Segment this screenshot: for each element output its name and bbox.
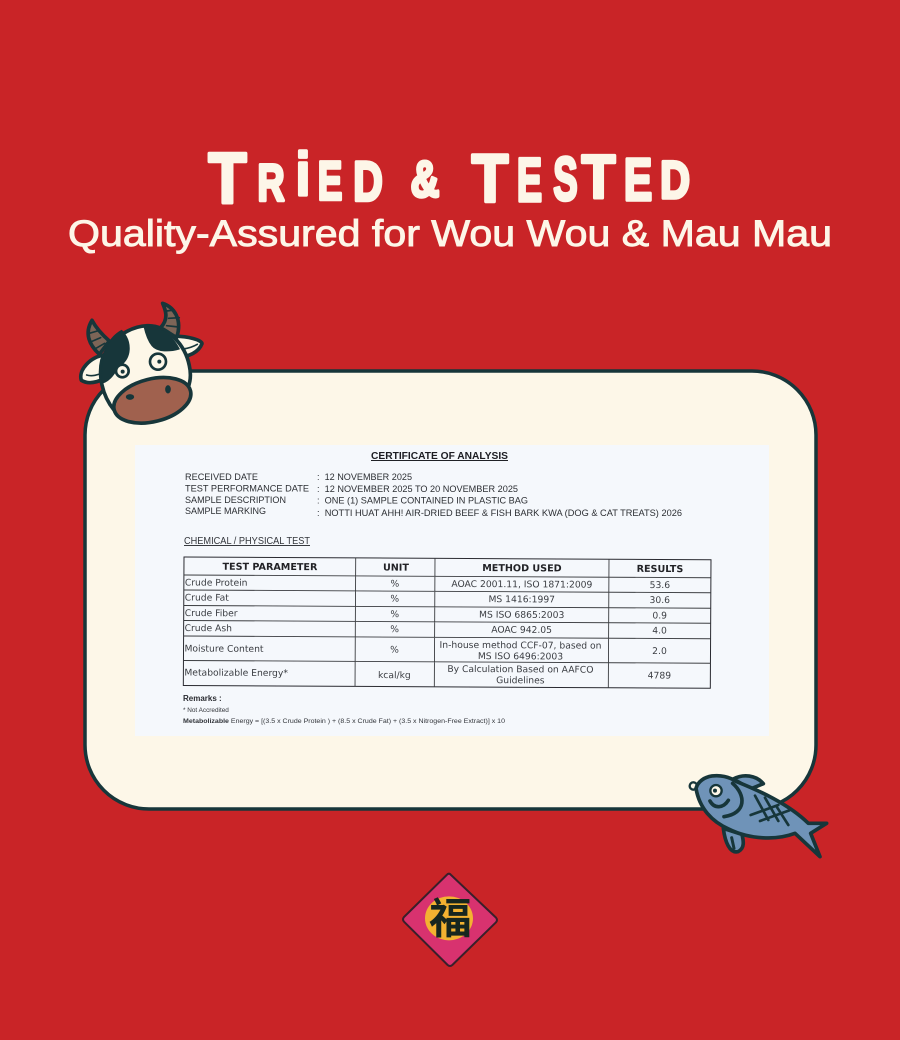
test results table: % (390, 609, 399, 620)
test results table: Metabolizable Energy* (184, 668, 288, 679)
icon: cow (81, 303, 202, 431)
title: D (353, 151, 383, 213)
test results table: % (390, 645, 399, 656)
sample details: TEST PERFORMANCE DATE (185, 484, 309, 494)
subtitle: Quality-Assured for Wou Wou & Mau Mau (68, 213, 832, 254)
test results table: % (390, 624, 399, 635)
icon: fu diamond (403, 874, 497, 966)
test results table: Moisture Content (184, 644, 264, 655)
sample details: RECEIVED DATE (185, 472, 258, 483)
title: D (660, 151, 690, 210)
certificate heading: CERTIFICATE OF ANALYSIS (371, 451, 508, 462)
test results table: 30.6 (650, 595, 670, 606)
test results table: 0.9 (652, 610, 667, 622)
test results table: By Calculation Based on AAFCO (447, 664, 593, 676)
left horn (88, 320, 109, 354)
remarks: * Not Accredited (183, 707, 229, 714)
icon: fish (690, 776, 827, 857)
test results table: UNIT (383, 563, 409, 574)
sample details: SAMPLE MARKING (185, 506, 266, 517)
right eye (150, 354, 166, 370)
test results table: Crude Fat (185, 593, 229, 604)
test results table: RESULTS (637, 564, 683, 575)
title (208, 139, 690, 219)
test results table: 4.0 (652, 625, 667, 637)
test results table: MS 1416:1997 (488, 594, 555, 605)
eye (710, 785, 722, 796)
sample details: : 12 NOVEMBER 2025 (317, 472, 412, 483)
panel: certificate card (85, 371, 816, 809)
test results table: TEST PARAMETER (222, 562, 318, 573)
certificate of analysis document (135, 445, 769, 736)
right ear (176, 336, 202, 357)
left eye (116, 365, 129, 377)
test results table: % (390, 594, 399, 605)
section label: CHEMICAL / PHYSICAL TEST (184, 536, 310, 547)
diamond (403, 874, 497, 966)
title: R (257, 153, 285, 212)
test results table: 2.0 (652, 646, 667, 657)
sample details: : NOTTI HUAT AHH! AIR-DRIED BEEF & FISH BARK KWA (DOG & CAT TREATS) 2026 (317, 508, 682, 519)
test results table: AOAC 2001.11, ISO 1871:2009 (451, 579, 593, 591)
certificate sheet (135, 445, 769, 736)
body and tail (696, 776, 827, 857)
gold circle (425, 896, 473, 940)
remarks: Metabolizable Energy = [(3.5 x Crude Protein ) + (8.5 x Crude Fat) + (3.5 x Nitrogen-Free Extract)] x 10 (183, 718, 505, 725)
sample details: : 12 NOVEMBER 2025 TO 20 NOVEMBER 2025 (317, 484, 518, 495)
sample details: : ONE (1) SAMPLE CONTAINED IN PLASTIC BAG (317, 496, 528, 506)
title: T (582, 143, 615, 212)
test results table: AOAC 942.05 (491, 625, 552, 636)
test results table (183, 557, 711, 688)
nose (690, 782, 697, 790)
test results table: MS ISO 6496:2003 (478, 651, 563, 662)
test results table: 4789 (648, 670, 671, 682)
sample details: SAMPLE DESCRIPTION (185, 495, 286, 506)
remarks (183, 694, 505, 725)
title: E (517, 146, 542, 214)
title: T (208, 139, 247, 219)
test results table: METHOD USED (482, 563, 562, 574)
test results table: 53.6 (650, 580, 670, 591)
test results table: MS ISO 6865:2003 (479, 610, 564, 621)
bottom fin (723, 828, 743, 852)
muzzle (109, 370, 196, 431)
title: & (411, 151, 439, 208)
scales (751, 796, 789, 825)
test results table: Crude Protein (185, 578, 248, 589)
sample details (185, 472, 682, 519)
test results table: kcal/kg (378, 670, 411, 681)
nostrils (126, 386, 170, 399)
test results table: Crude Ash (185, 623, 232, 634)
head patches (102, 326, 179, 383)
test results table: % (390, 579, 400, 590)
right horn (161, 303, 179, 338)
title: E (624, 146, 652, 213)
title: E (318, 150, 342, 211)
test results table: Guidelines (496, 675, 545, 686)
title: S (553, 144, 578, 213)
test results table: In-house method CCF-07, based on (440, 640, 602, 652)
top fin (733, 776, 763, 789)
head (101, 326, 190, 420)
mouth (710, 800, 728, 807)
title: T (472, 140, 508, 216)
remarks: Remarks : (183, 694, 222, 703)
title: i (296, 141, 310, 208)
test results table: Crude Fiber (185, 608, 238, 619)
left ear (81, 355, 110, 383)
fu character: 福 (429, 896, 472, 944)
gill (724, 783, 742, 817)
